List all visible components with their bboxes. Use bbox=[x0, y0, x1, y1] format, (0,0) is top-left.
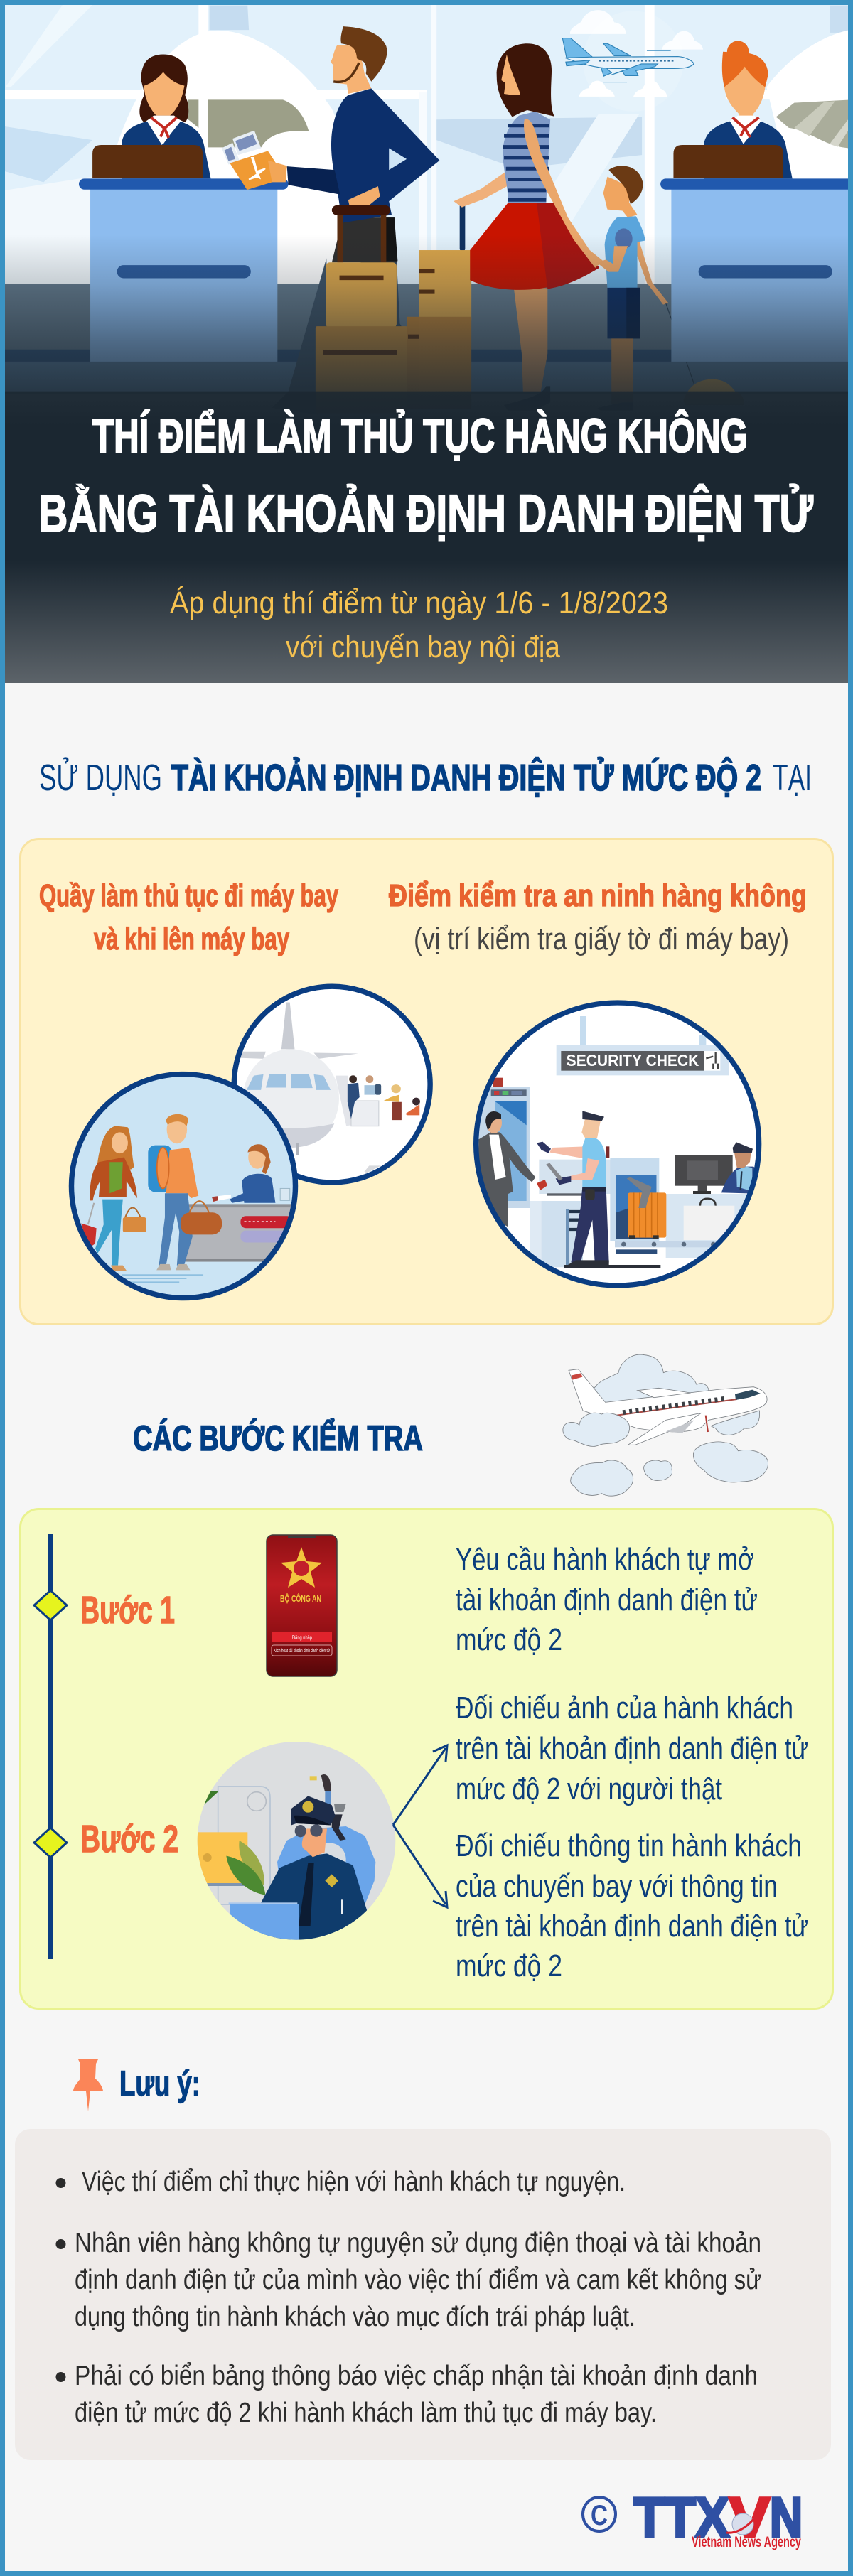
circle: security check scene: SECURITY CHECK bbox=[567, 1051, 699, 1069]
heading: notes: Lưu ý: bbox=[119, 2064, 200, 2103]
panel: notes bbox=[15, 2129, 831, 2460]
panel: steps bbox=[20, 1509, 833, 2008]
icon: phone with VNeID app: Đăng nhập bbox=[292, 1634, 312, 1641]
note 1: Việc thí điểm chỉ thực hiện với hành khách tự nguyện. bbox=[82, 2167, 626, 2197]
logo: TTXVN Vietnam News Agency: C bbox=[591, 2500, 608, 2531]
text: step 1 description bbox=[456, 1542, 758, 1657]
text: step 1 description: mức độ 2 bbox=[456, 1622, 562, 1657]
note 2: dụng thông tin hành khách vào mục đích trái pháp luật. bbox=[75, 2302, 635, 2332]
logo: TTXVN Vietnam News Agency: Vietnam News Agency bbox=[692, 2534, 801, 2550]
note 2 bbox=[55, 2228, 761, 2332]
subtitle line 2: với chuyến bay nội địa bbox=[286, 630, 560, 664]
label: check-in counter and boarding bbox=[39, 878, 338, 956]
note 3: Phải có biển bảng thông báo việc chấp nhận tài khoản định danh bbox=[75, 2361, 758, 2391]
logo: TTXVN Vietnam News Agency: TTX bbox=[634, 2486, 729, 2548]
circle: passengers at check-in desk bbox=[70, 1073, 296, 1299]
step 2 marker bbox=[34, 1828, 67, 1858]
label: check-in counter and boarding: Quầy làm thủ tục đi máy bay bbox=[39, 878, 338, 913]
timeline line bbox=[48, 1534, 53, 1959]
hero illustration: airport check-in counter bbox=[5, 5, 851, 683]
text: step 1 description: Yêu cầu hành khách tự mở bbox=[456, 1542, 754, 1577]
window panes and aircraft background bbox=[5, 5, 851, 394]
text: step 2 information comparison: mức độ 2 bbox=[456, 1949, 562, 1983]
icon: phone with VNeID app: Kích hoạt tài khoản định danh điện tử bbox=[274, 1648, 330, 1654]
step 1 marker bbox=[34, 1590, 67, 1620]
text: step 1 description: tài khoản định danh điện tử bbox=[456, 1583, 758, 1617]
passenger man with boarding pass and suitcases bbox=[222, 26, 439, 392]
circle: security check scene bbox=[476, 1003, 763, 1286]
step 1 label: Bước 1 bbox=[80, 1589, 175, 1632]
label: check-in counter and boarding: và khi lên máy bay bbox=[94, 922, 289, 956]
icon: phone with VNeID app: BỘ CÔNG AN bbox=[280, 1593, 321, 1604]
heading: inspection steps: CÁC BƯỚC KIỂM TRA bbox=[133, 1418, 423, 1458]
circle: officer at laptop bbox=[198, 1742, 395, 1940]
dark gradient overlay behind title bbox=[5, 244, 848, 683]
section heading: use level 2 account at: TẠI bbox=[773, 758, 812, 799]
arrow: to photo comparison bbox=[393, 1745, 447, 1825]
icon: airplane and clouds illustration bbox=[563, 1354, 768, 1496]
icon: push pin bbox=[73, 2059, 103, 2111]
text: step 2 information comparison bbox=[456, 1828, 808, 1983]
note 3 bbox=[55, 2361, 758, 2428]
panel: locations bbox=[20, 839, 833, 1325]
text: step 2 photo comparison: mức độ 2 với người thật bbox=[456, 1772, 722, 1806]
note 3: điện tử mức độ 2 khi hành khách làm thủ tục đi máy bay. bbox=[75, 2398, 657, 2428]
subtitle line 1: Áp dụng thí điểm từ ngày 1/6 - 1/8/2023 bbox=[170, 586, 668, 620]
arrow: to information comparison bbox=[393, 1825, 447, 1907]
left check-in counter with agent bbox=[79, 55, 289, 362]
logo: TTXVN Vietnam News Agency: N bbox=[770, 2486, 803, 2548]
icon: airplane among clouds bbox=[562, 10, 703, 97]
passenger woman, child, tall suitcase, right counter bbox=[419, 41, 851, 411]
circle: boarding at aircraft bbox=[232, 986, 430, 1182]
section heading: use level 2 account at: SỬ DỤNG bbox=[39, 757, 162, 799]
logo: TTXVN Vietnam News Agency bbox=[583, 2486, 803, 2550]
logo: TTXVN Vietnam News Agency: V bbox=[729, 2486, 770, 2548]
icon: phone with VNeID app bbox=[267, 1535, 337, 1676]
text: step 2 information comparison: của chuyến bay với thông tin bbox=[456, 1869, 778, 1904]
step 2 label: Bước 2 bbox=[80, 1818, 178, 1860]
text: step 2 photo comparison bbox=[456, 1691, 808, 1806]
